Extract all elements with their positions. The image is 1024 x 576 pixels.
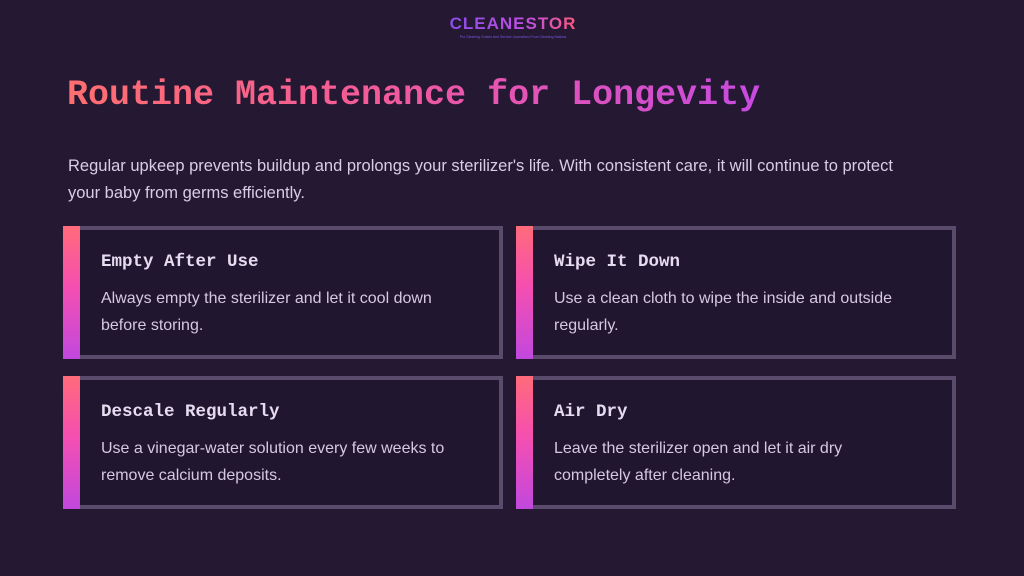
logo: Pro Cleaning Guides And Service Journalism From Cleaning Nations — [460, 35, 566, 39]
card: empty after use: Always empty the sterilizer and let it cool down before storing. — [101, 290, 432, 334]
card: wipe it down — [516, 226, 956, 359]
card: empty after use — [63, 226, 503, 359]
card: air dry: Leave the sterilizer open and let it air dry completely after cleaning. — [554, 440, 842, 484]
card: wipe it down: Wipe It Down — [554, 252, 680, 272]
intro text: Regular upkeep prevents buildup and prolongs your sterilizer's life. With consistent care, it will continue to protect your baby from germs efficiently. — [68, 157, 893, 202]
card: air dry: Air Dry — [554, 402, 628, 422]
card: wipe it down: Use a clean cloth to wipe the inside and outside regularly. — [554, 290, 892, 334]
title: Routine Maintenance for Longevity — [67, 75, 760, 115]
card: air dry — [516, 376, 956, 509]
logo: CLEANESTOR — [450, 14, 576, 33]
card: descale regularly: Descale Regularly — [101, 402, 280, 422]
card: descale regularly — [63, 376, 503, 509]
card: empty after use: Empty After Use — [101, 252, 259, 272]
card: descale regularly: Use a vinegar-water solution every few weeks to remove calcium deposits. — [101, 440, 444, 484]
